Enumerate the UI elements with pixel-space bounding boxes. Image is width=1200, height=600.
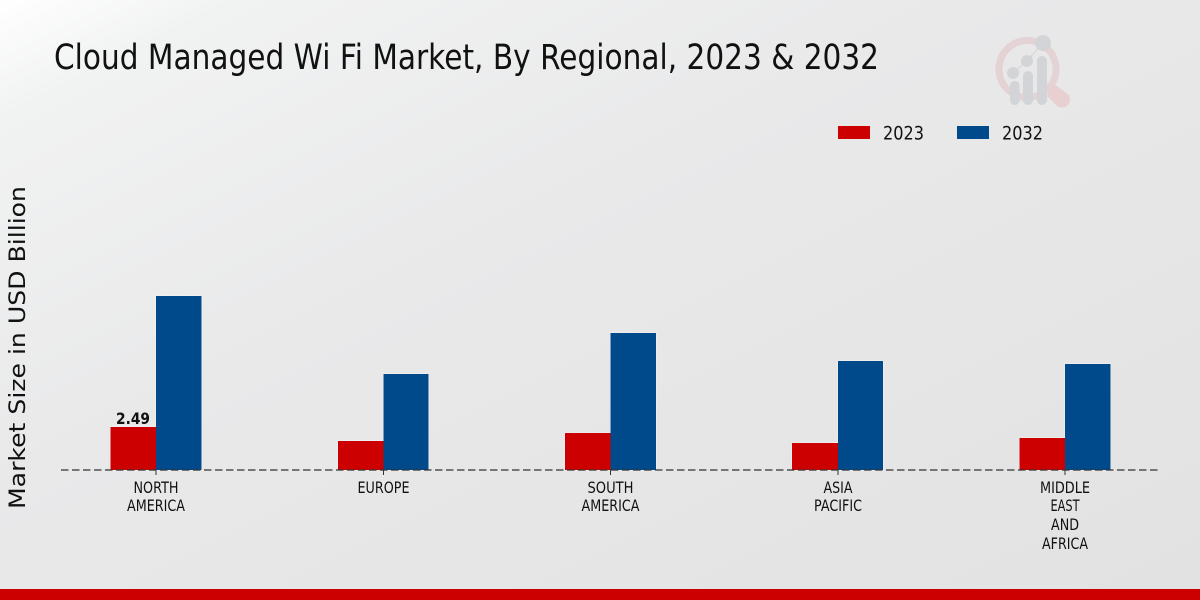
legend item: 2032 <box>957 122 1043 144</box>
category label: Asia Pacific: PACIFIC <box>814 496 862 515</box>
bars: Asia Pacific <box>792 361 883 470</box>
legend item: 2032: 2032 <box>1002 122 1043 144</box>
footer bar <box>0 589 1200 600</box>
data label: 2.49: 2.49 <box>116 409 150 428</box>
legend item: 2023: 2023 <box>883 122 924 144</box>
category label: Middle East and Africa: EAST <box>1050 496 1080 515</box>
bars: Middle East and Africa <box>1020 364 1110 470</box>
category label: South America <box>582 478 640 515</box>
category label: North America <box>127 478 185 515</box>
bars: South America <box>565 333 656 470</box>
title: Cloud Managed Wi Fi Market, By Regional, 2023 & 2032 <box>54 38 879 78</box>
legend item: 2023 <box>838 122 924 144</box>
bars: North America <box>110 296 202 470</box>
category label: Middle East and Africa: AFRICA <box>1042 534 1088 553</box>
category label: Europe: EUROPE <box>358 478 410 497</box>
category label: Asia Pacific <box>814 478 862 515</box>
category label: South America: SOUTH <box>588 478 634 497</box>
legend <box>838 122 1043 144</box>
category label: Middle East and Africa: MIDDLE <box>1040 478 1090 497</box>
category label: South America: AMERICA <box>582 496 640 515</box>
axis baseline <box>61 470 1160 475</box>
bars: Europe <box>338 374 428 470</box>
y axis label: Market Size in USD Billion <box>6 186 31 509</box>
category label: Asia Pacific: ASIA <box>824 478 853 497</box>
category label: North America: NORTH <box>134 478 178 497</box>
category label: Middle East and Africa: AND <box>1051 515 1079 534</box>
category label: North America: AMERICA <box>127 496 185 515</box>
icon: watermark logo <box>999 35 1070 108</box>
category label: Middle East and Africa <box>1040 478 1090 553</box>
